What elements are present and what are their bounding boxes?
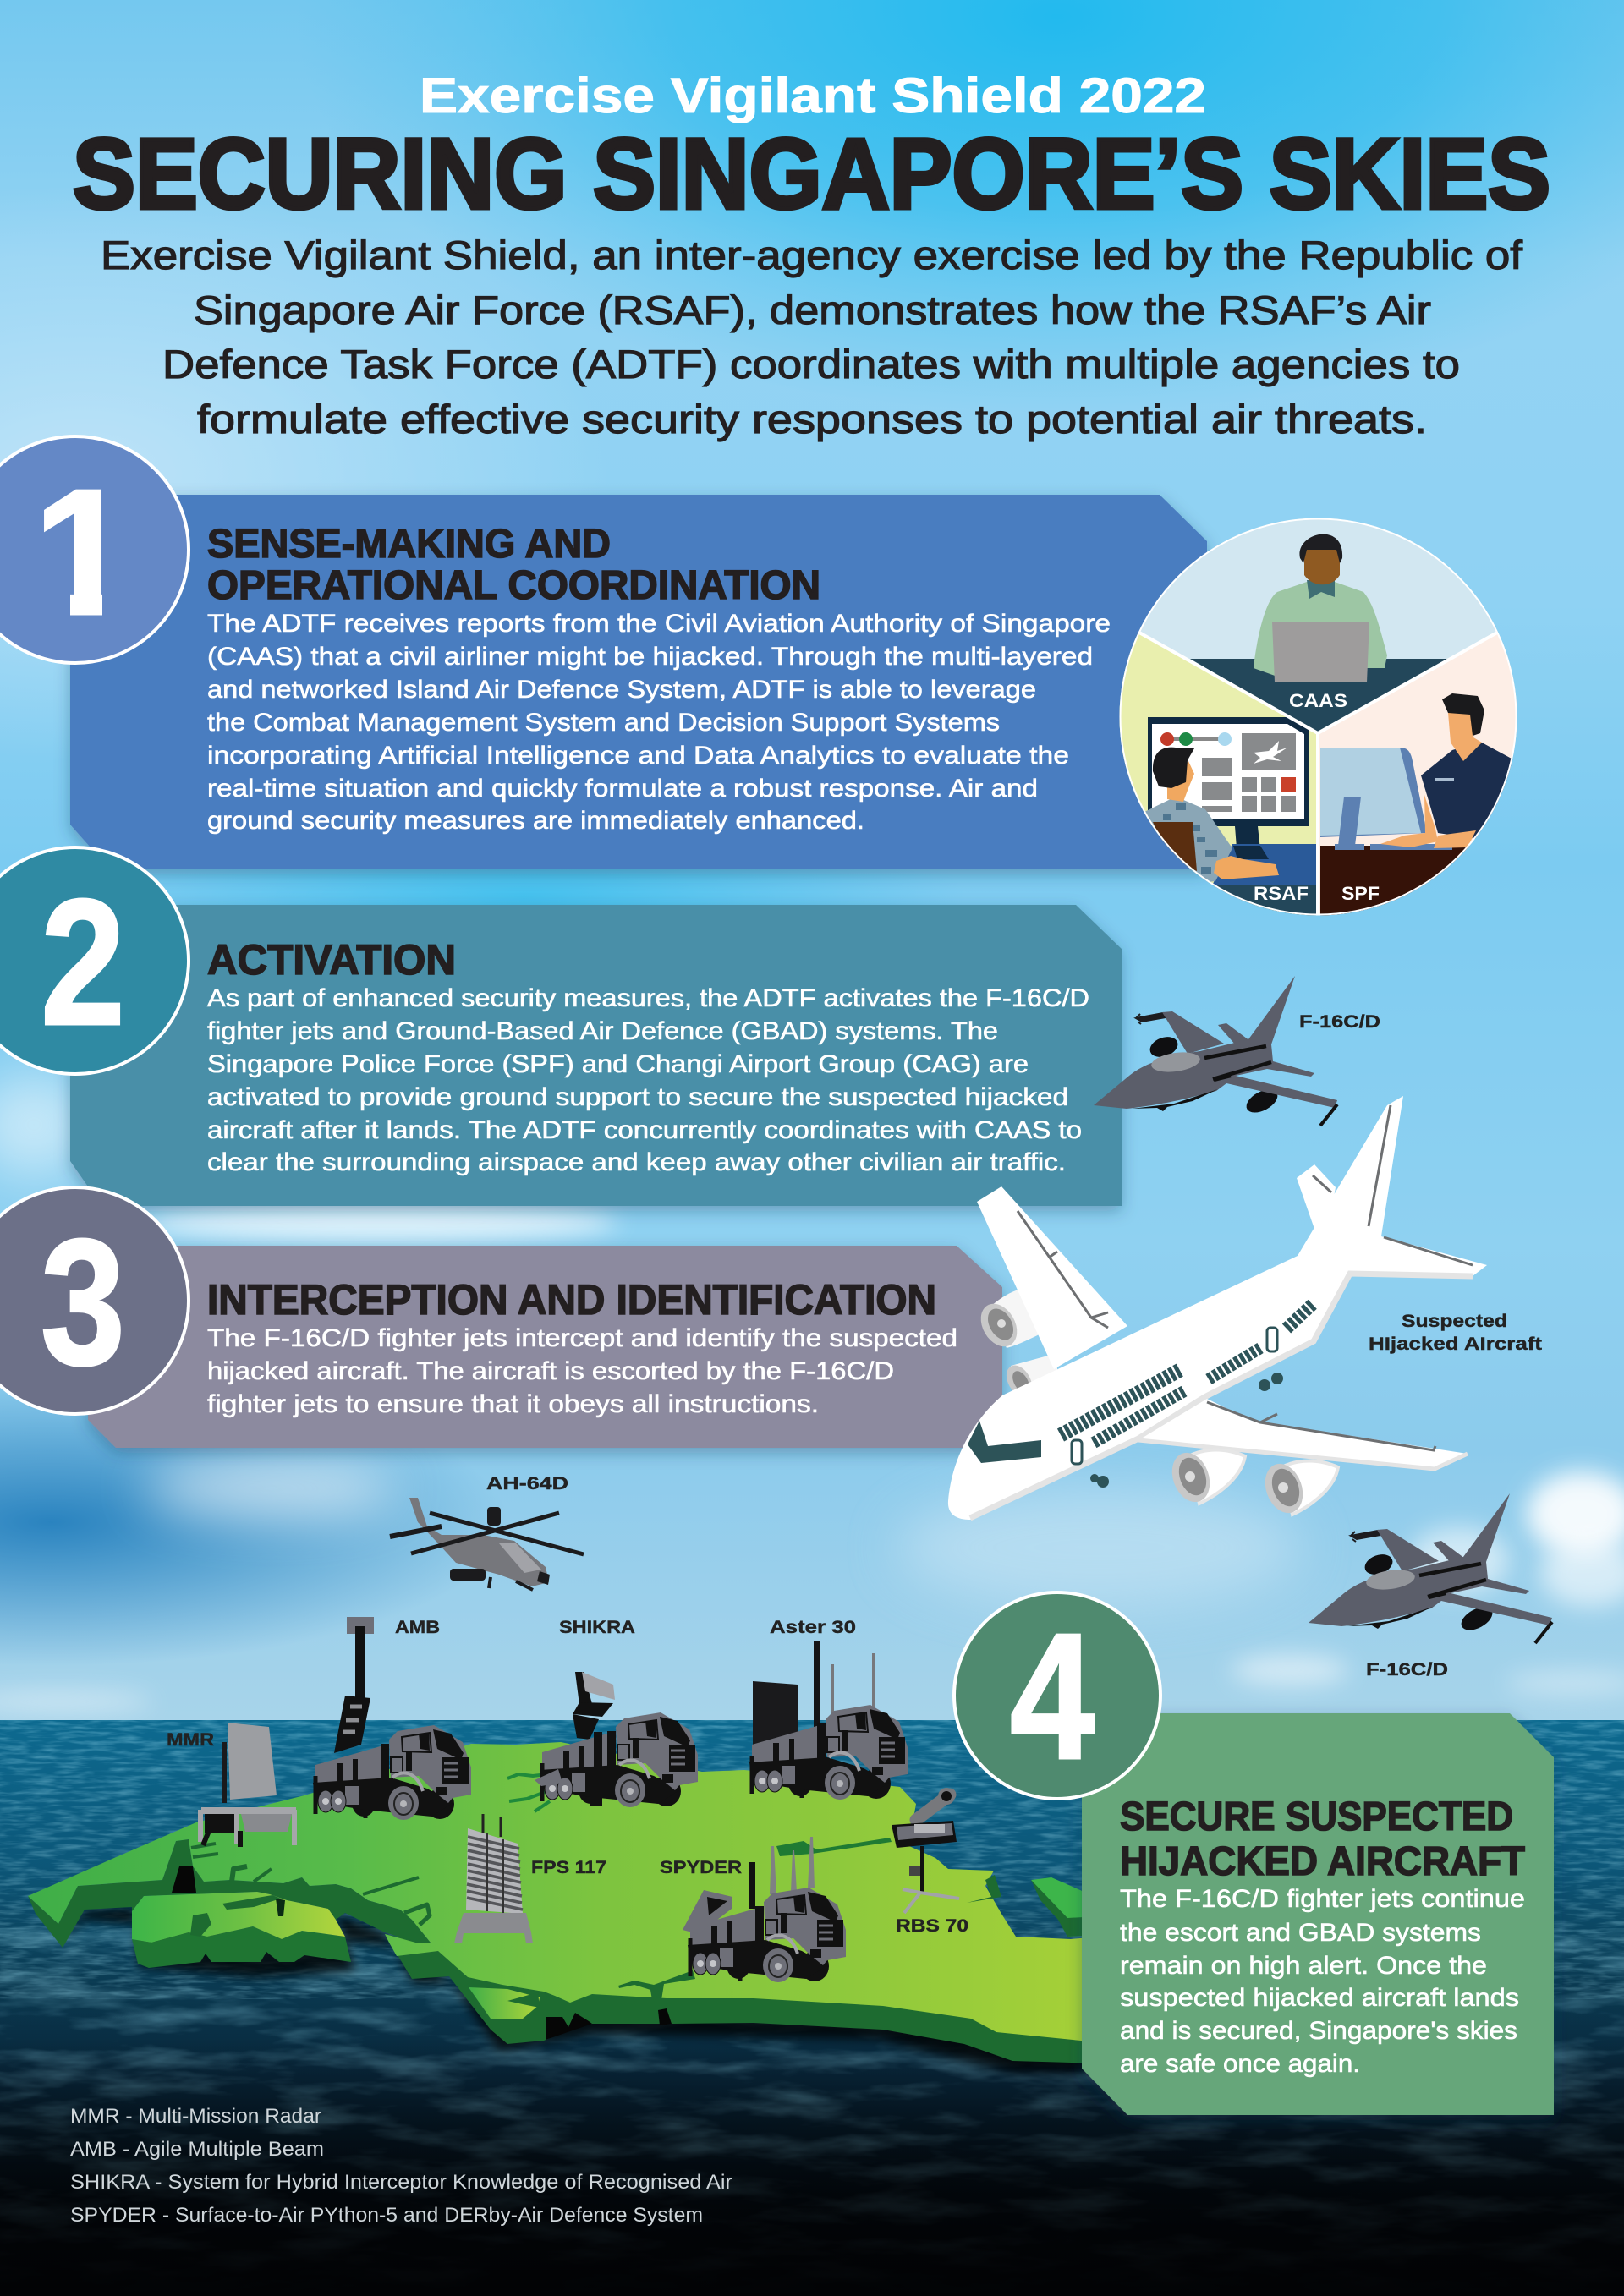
cockpit window <box>968 1421 1041 1463</box>
panel 2 body text: clear the surrounding airspace and keep away other civilian air traffic. <box>207 1148 1066 1176</box>
number badge 3: 3 <box>41 1202 125 1402</box>
F-16 jet top <box>1094 976 1337 1126</box>
label CAAS: CAAS <box>1289 690 1347 711</box>
panel 1 body text <box>207 610 1111 835</box>
panel 3 background <box>88 1246 1002 1448</box>
southern channel <box>618 1970 695 2000</box>
island of Singapore <box>28 1742 1100 2072</box>
near engines <box>1166 1448 1338 1518</box>
number badge 3 <box>0 1187 189 1414</box>
southwest land surface <box>132 1892 345 1943</box>
label Aster 30: Aster 30 <box>770 1618 856 1637</box>
panel 4 body text: The F-16C/D fighter jets continue <box>1120 1885 1525 1913</box>
intro paragraph: formulate effective security responses to potential air threats. <box>197 397 1427 441</box>
title: Exercise Vigilant Shield 2022: Exercise Vigilant Shield 2022 <box>420 68 1206 123</box>
main land surface <box>28 1742 1100 2041</box>
label F-16C/D top: F-16C/D <box>1299 1012 1380 1032</box>
panel 1 heading: OPERATIONAL COORDINATION <box>207 563 820 608</box>
panel 2 body text: As part of enhanced security measures, the ADTF activates the F-16C/D <box>207 984 1089 1012</box>
panel 4 heading: HIJACKED AIRCRAFT <box>1120 1839 1525 1884</box>
eastern islet <box>1031 1877 1100 1937</box>
legend of abbreviations: MMR - Multi-Mission Radar <box>70 2105 321 2128</box>
monitor: RSAF <box>1148 717 1309 826</box>
label AMB: AMB <box>395 1618 440 1637</box>
Sentosa piece <box>469 1987 540 2019</box>
near wing <box>1138 1399 1468 1469</box>
panel 4 body text: suspected hijacked aircraft lands <box>1120 1984 1519 2012</box>
panel 3 body text: The F-16C/D fighter jets intercept and identify the suspected <box>207 1324 957 1352</box>
panel 1 body text: and networked Island Air Defence System, ADTF is able to leverage <box>207 676 1036 704</box>
panel 3: interception <box>88 1246 1002 1448</box>
panel 2 body text: activated to provide ground support to secure the suspected hijacked <box>207 1083 1068 1111</box>
label MMR: MMR <box>167 1730 214 1750</box>
panel 1 body text: (CAAS) that a civil airliner might be hijacked. Through the multi-layered <box>207 643 1093 671</box>
illustration: agencies circle <box>1100 518 1523 922</box>
sector: SPF <box>1318 633 1523 922</box>
fuselage <box>948 1096 1487 1520</box>
panel 3 body text: hijacked aircraft. The aircraft is escorted by the F-16C/D <box>207 1357 894 1385</box>
panel 2 body text: aircraft after it lands. The ADTF concurrently coordinates with CAAS to <box>207 1116 1082 1144</box>
panel 4 body text: the escort and GBAD systems <box>1120 1919 1481 1947</box>
south side <box>385 1934 1100 2063</box>
MMR radar <box>200 1723 296 1847</box>
panel 1 body text: ground security measures are immediately enhanced. <box>207 807 864 835</box>
suspected hijacked aircraft <box>948 1096 1487 1520</box>
panel 4 body text <box>1120 1885 1525 2078</box>
far wing <box>977 1186 1127 1369</box>
label suspected hijacked aircraft: Suspected <box>1402 1312 1507 1331</box>
panel 1 body text: the Combat Management System and Decision Support Systems <box>207 709 1000 737</box>
main heading: SECURING SINGAPORE’S SKIES <box>73 118 1550 230</box>
label RBS 70: RBS 70 <box>896 1916 968 1936</box>
panel 4 heading: SECURE SUSPECTED <box>1120 1795 1513 1839</box>
label SHIKRA: SHIKRA <box>559 1618 635 1637</box>
black coastal gap <box>172 1866 196 1893</box>
intro paragraph: Defence Task Force (ADTF) coordinates with multiple agencies to <box>162 342 1460 386</box>
panel 2 background <box>70 905 1122 1206</box>
SHIKRA vehicle <box>535 1672 698 1807</box>
background: sky <box>0 0 1624 1725</box>
panel 4 background <box>1082 1713 1554 2115</box>
label AH-64D: AH-64D <box>486 1474 568 1493</box>
doors <box>1072 1328 1277 1464</box>
label SPF: SPF <box>1341 883 1380 904</box>
label SPYDER: SPYDER <box>660 1858 742 1877</box>
panel 1 body text: incorporating Artificial Intelligence and Data Analytics to evaluate the <box>207 742 1069 770</box>
label FPS 117: FPS 117 <box>531 1858 606 1877</box>
panel 3 body text <box>207 1324 957 1418</box>
black south gaps <box>546 2013 592 2040</box>
label F-16C/D bottom: F-16C/D <box>1366 1660 1448 1680</box>
intro paragraph <box>101 233 1523 441</box>
label suspected hijacked aircraft: HIjacked AIrcraft <box>1369 1334 1542 1354</box>
eastern channel <box>776 1838 892 1856</box>
landing gear <box>1090 1373 1283 1488</box>
number badge 1 <box>0 436 189 663</box>
SPYDER vehicle <box>683 1837 846 1982</box>
legend of abbreviations <box>70 2105 732 2227</box>
background: sea <box>0 1720 1624 2296</box>
label RSAF: RSAF <box>1254 883 1309 904</box>
panel 2 heading: ACTIVATION <box>207 936 456 984</box>
southwest land side <box>132 1926 351 1968</box>
river fingers <box>191 1844 430 1925</box>
far engines <box>974 1287 1057 1401</box>
panel 4 body text: are safe once again. <box>1120 2050 1360 2078</box>
CAAS officer <box>1254 534 1387 682</box>
FPS 117 radar <box>454 1814 533 1943</box>
panel 4 heading <box>1120 1795 1525 1884</box>
sector: CAAS <box>1139 524 1497 733</box>
AH-64D helicopter <box>390 1498 584 1590</box>
Aster 30 vehicle <box>749 1641 908 1800</box>
legend of abbreviations: AMB - Agile Multiple Beam <box>70 2138 324 2161</box>
panel 2 body text: Singapore Police Force (SPF) and Changi Airport Group (CAG) are <box>207 1050 1029 1078</box>
Shikra area green channels <box>508 1774 550 1811</box>
intro paragraph: Singapore Air Force (RSAF), demonstrates how the RSAF’s Air <box>194 288 1431 332</box>
number badge 2 <box>0 847 189 1074</box>
panel 4 body text: and is secured, Singapore's skies <box>1120 2017 1517 2045</box>
island shadow <box>59 1907 1100 2072</box>
panel 3 body text: fighter jets to ensure that it obeys all instructions. <box>207 1390 819 1418</box>
legend of abbreviations: SPYDER - Surface-to-Air PYthon-5 and DERby-Air Defence System <box>70 2204 703 2227</box>
panel 3 heading: INTERCEPTION AND IDENTIFICATION <box>207 1276 936 1323</box>
intro paragraph: Exercise Vigilant Shield, an inter-agency exercise led by the Republic of <box>101 233 1523 277</box>
panel 1 background <box>70 495 1207 869</box>
southwest channels <box>190 1895 285 1937</box>
RBS 70 launcher <box>892 1788 959 1913</box>
panel 1 body text: real-time situation and quickly formulate a robust response. Air and <box>207 775 1038 803</box>
panel 1 heading <box>207 522 820 608</box>
panel 4 body text: remain on high alert. Once the <box>1120 1952 1487 1980</box>
number badge 2: 2 <box>41 862 125 1062</box>
panel 1: sense-making <box>70 495 1207 869</box>
far stabilizer <box>1297 1164 1336 1231</box>
east coast edge <box>967 1875 1001 1903</box>
panel 2 body text: fighter jets and Ground-Based Air Defence (GBAD) systems. The <box>207 1017 998 1045</box>
panel 4: secure aircraft <box>1082 1713 1554 2115</box>
island channel and west side <box>28 1839 431 1948</box>
SPF officer <box>1380 693 1522 848</box>
panel 2: activation <box>70 905 1122 1206</box>
AMB vehicle <box>313 1617 471 1820</box>
panel 1 heading: SENSE-MAKING AND <box>207 522 611 567</box>
panel 1 body text: The ADTF receives reports from the Civil Aviation Authority of Singapore <box>207 610 1111 638</box>
F-16 jet bottom <box>1309 1493 1552 1643</box>
number badge 1: 1 <box>33 452 133 652</box>
RSAF officer <box>1144 748 1279 884</box>
label suspected hijacked aircraft <box>1369 1312 1542 1354</box>
sector: RSAF <box>1120 633 1316 915</box>
legend of abbreviations: SHIKRA - System for Hybrid Interceptor Knowledge of Recognised Air <box>70 2171 732 2194</box>
number badge 4: 4 <box>1010 1596 1095 1796</box>
passenger windows <box>1061 1304 1313 1443</box>
number badge 4 <box>954 1592 1160 1799</box>
SPF monitor <box>1320 748 1427 846</box>
panel 2 body text <box>207 984 1089 1176</box>
